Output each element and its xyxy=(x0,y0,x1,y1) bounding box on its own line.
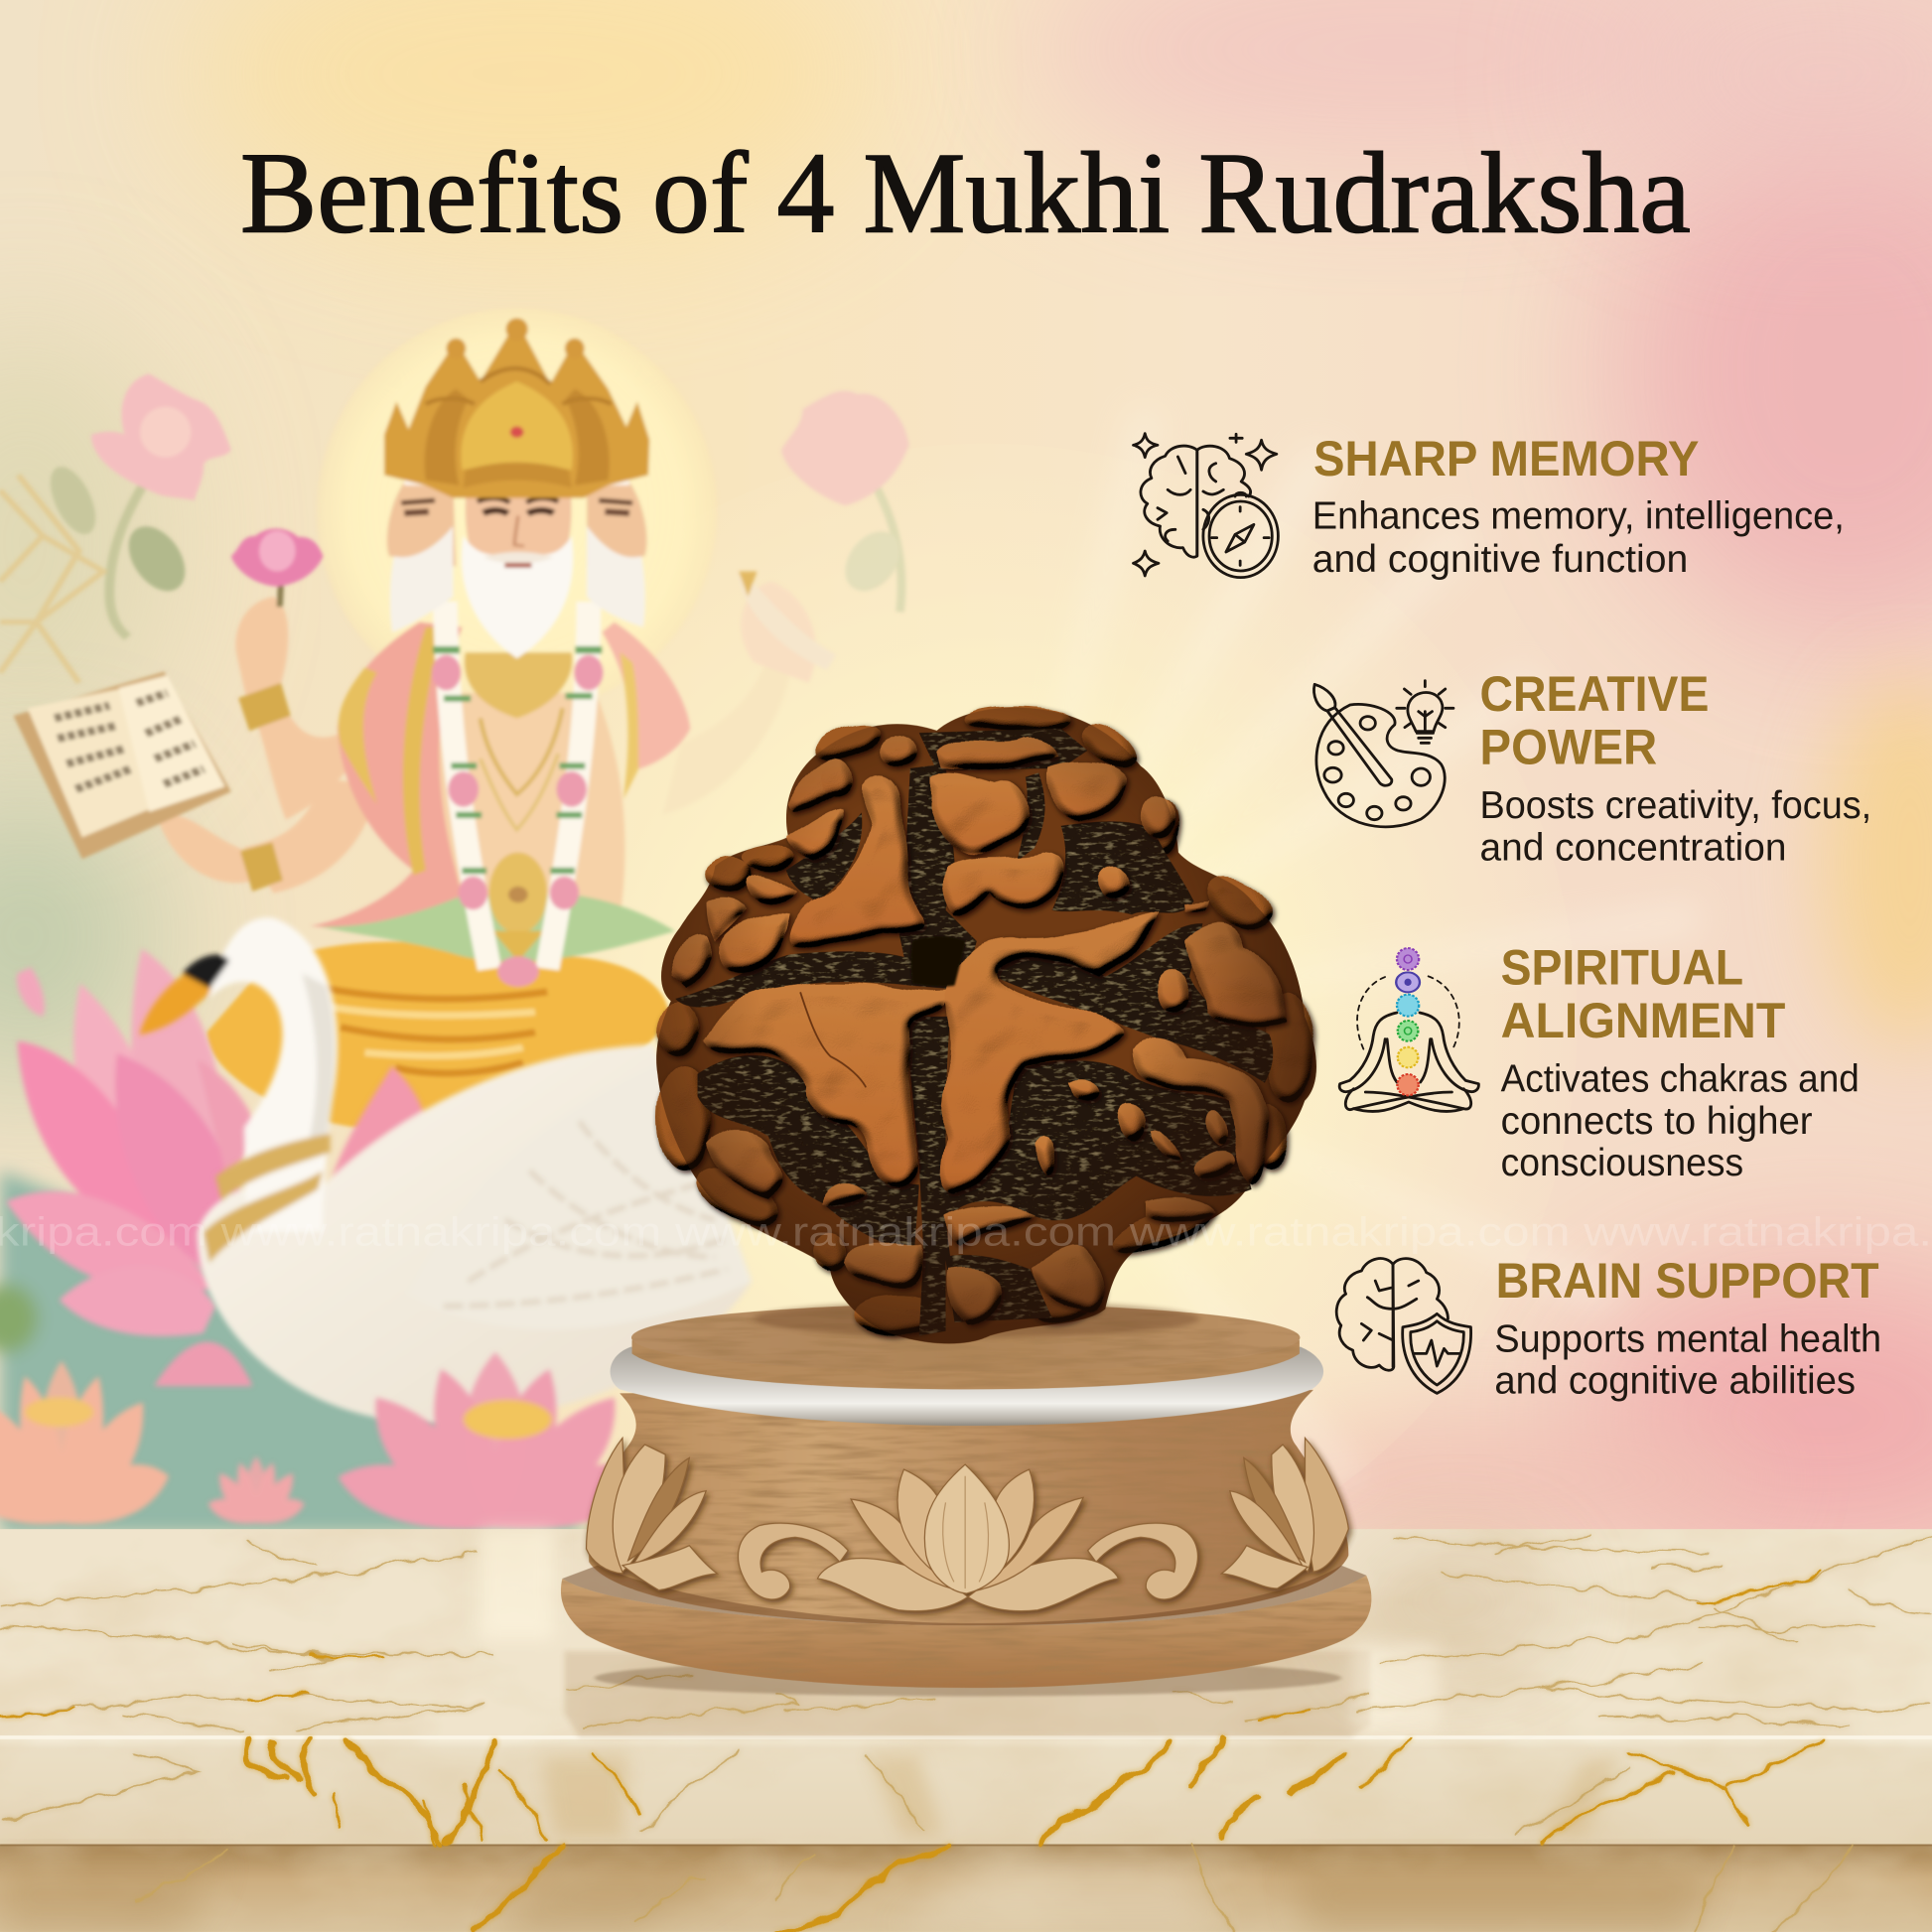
background lotus right xyxy=(781,391,910,612)
heading: POWER xyxy=(1480,719,1657,774)
scroll right xyxy=(1088,1523,1197,1599)
hairline crack on lobe xyxy=(800,992,866,1087)
lotus petal beside neck xyxy=(327,1066,426,1192)
description: Activates chakras and xyxy=(1501,1058,1860,1101)
center carved lotus xyxy=(738,1464,1197,1611)
dhoti xyxy=(207,942,669,1129)
benefit: brain support xyxy=(1336,1253,1881,1403)
pedestal body xyxy=(589,1390,1348,1625)
sacred geometry lines xyxy=(0,476,103,683)
lighter perimeter lobes xyxy=(657,706,1313,1335)
swan body xyxy=(198,1044,752,1423)
veins xyxy=(0,1532,1932,1932)
silver ring xyxy=(611,1347,1323,1426)
crown xyxy=(384,318,649,497)
icon: brain and shield xyxy=(1336,1259,1471,1393)
open book xyxy=(13,671,231,859)
flower garlands xyxy=(445,602,589,969)
shawl right xyxy=(602,621,690,768)
marble lower face xyxy=(0,1845,1932,1932)
contact shadow xyxy=(595,1660,1341,1696)
Brahma figure xyxy=(0,308,910,1129)
gold necklaces xyxy=(465,652,573,961)
faint right arms xyxy=(663,571,836,814)
shading overlay for roundness xyxy=(656,708,1316,1343)
icon: meditating figure with chakras xyxy=(1339,948,1478,1111)
tan streaks in the stone xyxy=(0,1756,1713,1932)
center hole xyxy=(910,936,966,987)
wooden pedestal with silver ring and lotus carving xyxy=(561,1301,1371,1696)
pond water xyxy=(0,1171,592,1534)
chakras xyxy=(1396,948,1420,1095)
left side lotus carving xyxy=(586,1438,717,1590)
description: consciousness xyxy=(1501,1142,1743,1184)
large lotus behind swan xyxy=(6,949,259,1386)
four mukhi rudraksha bead xyxy=(656,706,1316,1343)
description: Boosts creativity, focus, xyxy=(1480,784,1871,827)
heading: CREATIVE xyxy=(1480,666,1709,722)
description: and concentration xyxy=(1480,826,1787,869)
green sash xyxy=(316,896,675,962)
heading: SPIRITUAL xyxy=(1501,940,1743,996)
base disc xyxy=(561,1576,1371,1688)
heading: SHARP MEMORY xyxy=(1313,431,1699,486)
benefit: creative power xyxy=(1313,666,1871,869)
benefit: spiritual alignment xyxy=(1339,940,1860,1184)
description: connects to higher xyxy=(1501,1100,1813,1143)
swan neck xyxy=(209,917,338,1232)
marble countertop xyxy=(0,1528,1932,1932)
surface reflections xyxy=(481,1528,1565,1737)
bead silhouette xyxy=(656,708,1316,1343)
heading: BRAIN SUPPORT xyxy=(1496,1253,1879,1309)
left arms and hands xyxy=(158,597,377,893)
description: Enhances memory, intelligence, xyxy=(1312,494,1845,537)
blurred background scene: Brahma, swan and lotus pond xyxy=(0,308,910,1534)
swan xyxy=(139,917,752,1423)
right side lotus carving xyxy=(1221,1438,1348,1588)
central face and beard xyxy=(462,470,573,658)
icon: palette, brush and bulb xyxy=(1313,681,1453,827)
lower face gold veins xyxy=(475,1847,949,1932)
description: and cognitive function xyxy=(1312,538,1688,581)
halo xyxy=(316,308,718,713)
light rays from the bead xyxy=(986,407,1701,1491)
watermark: kripa.com www.ratnakripa.com www.ratnakripa.com www.ratnakripa.com www.ratnakripa. xyxy=(0,1209,1932,1255)
torso xyxy=(421,693,625,915)
scroll left xyxy=(738,1523,848,1599)
wing feathers xyxy=(407,1059,752,1329)
marble front edge xyxy=(0,1737,1932,1846)
dark grooves and textured patches xyxy=(675,729,1273,1335)
edge lines xyxy=(0,1735,1932,1738)
swan head and beak xyxy=(139,967,210,1035)
orange raised lobes xyxy=(671,737,1287,1326)
description: and cognitive abilities xyxy=(1494,1360,1856,1403)
heading: ALIGNMENT xyxy=(1501,993,1785,1048)
armbands xyxy=(238,683,291,892)
shawl left xyxy=(310,621,462,926)
held lotus xyxy=(231,528,324,607)
front edge gold veins xyxy=(245,1740,1343,1845)
top disc xyxy=(631,1301,1300,1389)
icon: brain and compass xyxy=(1133,434,1278,578)
benefit: sharp memory xyxy=(1133,431,1845,581)
side faces and beards xyxy=(387,478,647,632)
gold neck bands xyxy=(204,1134,331,1263)
background lotus left xyxy=(42,373,231,637)
title: Benefits of 4 Mukhi Rudraksha xyxy=(240,129,1691,257)
description: Supports mental health xyxy=(1494,1317,1881,1360)
marble top surface xyxy=(0,1529,1932,1738)
foreground lotus flowers xyxy=(0,1352,652,1529)
